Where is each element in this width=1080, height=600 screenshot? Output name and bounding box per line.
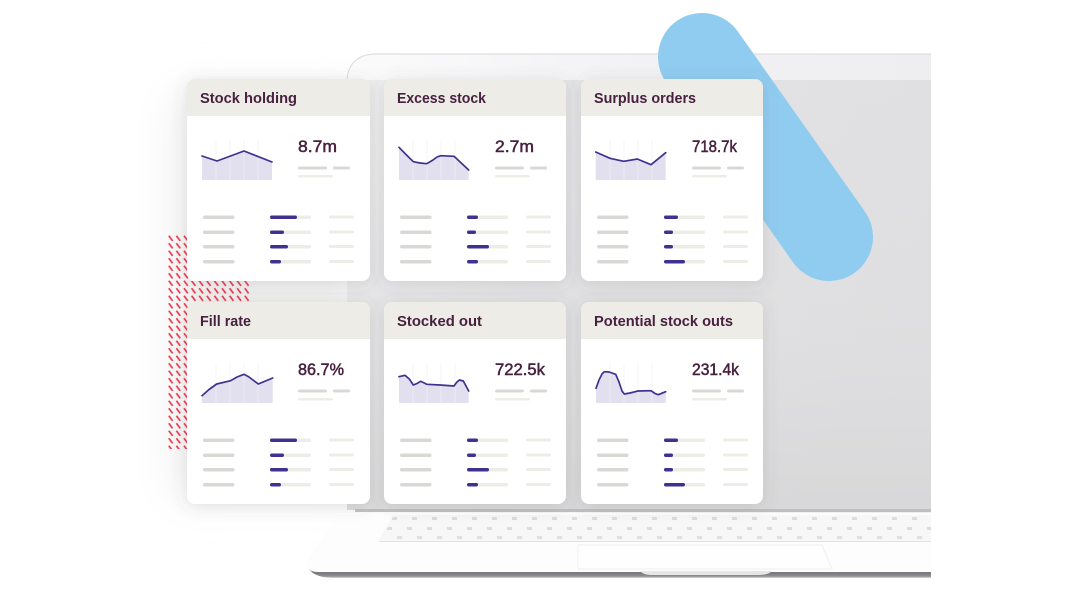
metric value: 722.5k: [495, 361, 546, 379]
heading: Fill rate: [200, 314, 251, 330]
metric value: 2.7m: [495, 138, 534, 156]
laptop keyboard base: [307, 513, 931, 578]
table rows: [597, 438, 748, 486]
card: Stock holding: [187, 79, 370, 281]
heading: Stock holding: [200, 91, 297, 107]
sparkline: [596, 140, 666, 180]
laptop: [307, 54, 931, 578]
sparkline: [399, 363, 469, 403]
heading: Surplus orders: [594, 91, 696, 107]
card: Fill rate: [187, 302, 370, 504]
metric value: 86.7%: [298, 361, 344, 379]
metric caption bars: [495, 166, 547, 178]
table rows: [400, 438, 551, 486]
metric value: 231.4k: [692, 361, 740, 379]
soft background shadow left of laptop: [175, 95, 365, 495]
table rows: [400, 216, 551, 264]
sparkline: [202, 140, 272, 180]
card: Surplus orders: [581, 79, 763, 281]
sparkline: [202, 363, 273, 403]
card: Potential stock outs: [581, 302, 763, 504]
table rows: [203, 438, 354, 486]
heading: Excess stock: [397, 91, 487, 107]
table rows: [203, 216, 354, 264]
heading: Potential stock outs: [594, 314, 733, 330]
metric caption bars: [298, 390, 350, 400]
metric caption bars: [495, 390, 547, 400]
heading: Stocked out: [397, 314, 482, 330]
card: Stocked out: [384, 302, 566, 504]
blue rounded diagonal bar: [702, 57, 829, 237]
sparkline: [596, 363, 666, 403]
metric value: 8.7m: [298, 138, 337, 156]
metric caption bars: [692, 390, 744, 400]
red hatch pattern: [167, 235, 249, 449]
metric caption bars: [692, 166, 744, 178]
card: Excess stock: [384, 79, 566, 281]
laptop lid and screen: [347, 54, 931, 513]
metric caption bars: [298, 166, 350, 178]
table rows: [597, 216, 748, 264]
metric value: 718.7k: [692, 138, 738, 156]
sparkline: [399, 140, 469, 180]
